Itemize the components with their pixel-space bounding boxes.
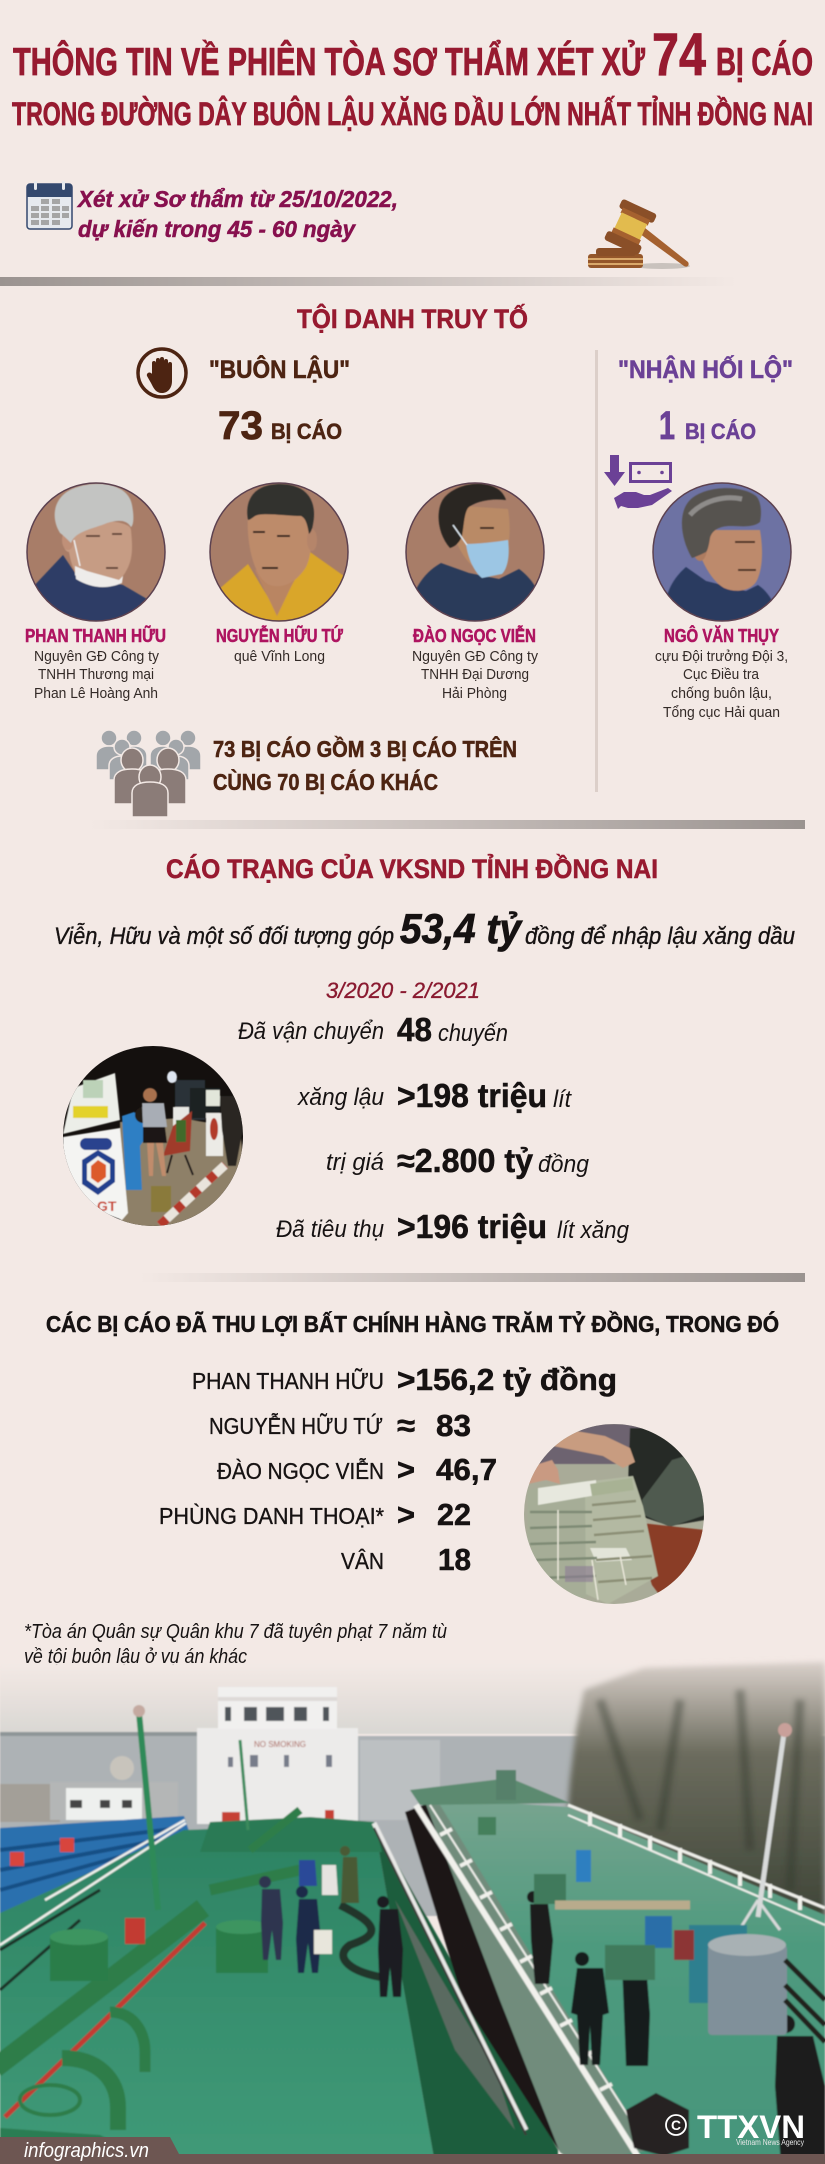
stat: value: đồng [538,1151,590,1178]
divider [90,820,805,829]
profit: Phùng Danh Thoại [159,1497,471,1532]
footnote: *Tòa án Quân sự Quân khu 7 đã tuyên phạt 7 năm tù [24,1621,447,1643]
defendant: Ngô Văn Thụy [655,625,788,721]
stat: smuggled fuel: lít [553,1086,572,1113]
period: 3/2020 - 2/2021 [326,978,480,1003]
profit: Đào Ngọc Viễn: 46,7 [436,1452,497,1487]
profit: Nguyễn Hữu Tứ: NGUYỄN HỮU TỨ [209,1411,383,1439]
profit: Phan Thanh Hữu: PHAN THANH HỮU [192,1367,384,1394]
heading: indictment: CÁO TRẠNG CỦA VKSND TỈNH ĐỒNG NAI [166,852,658,884]
defendant: Phan Thanh Hữu: TNHH Thương mại [38,666,154,683]
contribution statement [54,905,795,952]
defendant: Ngô Văn Thụy: Tổng cục Hải quan [663,704,780,721]
defendant: Ngô Văn Thụy: cựu Đội trưởng Đội 3, [655,648,788,665]
profit: Phùng Danh Thoại: > [397,1497,415,1532]
defendant: Ngô Văn Thụy: NGÔ VĂN THỤY [664,625,779,646]
defendant: Đào Ngọc Viễn: Nguyên GĐ Công ty [412,648,538,665]
stat: value: ≈2.800 tỷ [397,1142,534,1179]
charge: smuggling: "BUÔN LẬU" [209,354,350,384]
defendant: Đào Ngọc Viễn [412,625,538,702]
profit: Nguyễn Hữu Tứ [209,1408,471,1443]
defendant: Phan Thanh Hữu [25,625,166,702]
profit: Phùng Danh Thoại: PHÙNG DANH THOẠI* [159,1503,384,1529]
icon: gavel [588,199,690,269]
summary of defendants [213,735,517,795]
photo: stacks of money [524,1424,705,1610]
defendant: Ngô Văn Thụy: Cục Điều tra [683,666,760,683]
stat: consumed: >196 triệu [397,1208,547,1245]
divider [0,277,737,286]
icon: bribe money and hand [604,455,672,509]
portrait: Đào Ngọc Viễn [406,483,547,627]
summary of defendants: CÙNG 70 BỊ CÁO KHÁC [213,768,438,795]
profit: Nguyễn Hữu Tứ: ≈ [397,1408,415,1443]
column divider [595,350,598,792]
footnote: về tội buôn lậu ở vụ án khác [24,1646,247,1668]
defendant: Đào Ngọc Viễn: TNHH Đại Dương [421,666,529,683]
defendant: Phan Thanh Hữu: PHAN THANH HỮU [25,625,166,646]
portrait: Phan Thanh Hữu [26,482,166,622]
summary of defendants: 73 BỊ CÁO GỒM 3 BỊ CÁO TRÊN [213,735,517,762]
title: 74 [652,21,707,88]
profit: Vân: VÂN [341,1548,384,1574]
charge: taking bribes: 1 [659,404,675,448]
portrait: Nguyễn Hữu Tứ [210,483,348,626]
footer bar and website tab: infographics.vn [24,2140,149,2162]
profit: Phùng Danh Thoại: 22 [437,1497,471,1532]
contribution statement: đồng để nhập lậu xăng dầu [525,923,795,950]
profit: Vân: 18 [438,1542,471,1577]
icon: stop hand [138,349,186,397]
stat: consumed: Đã tiêu thụ [276,1216,384,1243]
stat: consumed [276,1208,630,1245]
profit: Đào Ngọc Viễn [217,1452,497,1487]
icon: calendar [27,181,72,229]
stat: smuggled fuel: >198 triệu [397,1077,547,1114]
trial date text: dự kiến trong 45 - 60 ngày [78,216,356,242]
defendant: Phan Thanh Hữu: Nguyên GĐ Công ty [34,648,159,665]
photo: petrol station: GT [97,1198,117,1214]
profit: Đào Ngọc Viễn: > [397,1452,415,1487]
defendant: Nguyễn Hữu Tứ: NGUYỄN HỮU TỨ [216,625,343,646]
stat: trips: 48 [397,1011,432,1048]
charge: taking bribes [618,354,793,448]
profit: Nguyễn Hữu Tứ: 83 [436,1408,471,1443]
footer bar and website tab [0,2137,825,2164]
divider [140,1273,805,1282]
stat: trips: Đã vận chuyển [238,1018,384,1045]
defendant: Nguyễn Hữu Tứ [216,625,343,665]
defendant: Nguyễn Hữu Tứ: quê Vĩnh Long [234,648,325,665]
charge: taking bribes: "NHẬN HỐI LỘ" [618,354,793,384]
footnote [24,1621,447,1668]
TTXVN logo: Vietnam News Agency [736,2138,804,2147]
charge: smuggling: BỊ CÁO [271,419,342,444]
profit: Phan Thanh Hữu: >156,2 tỷ đồng [397,1362,617,1397]
stat: value: trị giá [326,1149,384,1176]
photo: seized tanker ships [0,1662,825,2164]
icon: group of people [96,730,201,817]
photo: petrol station [63,1046,250,1228]
defendant: Phan Thanh Hữu: Phan Lê Hoàng Anh [34,685,158,702]
stat: smuggled fuel [297,1077,572,1114]
TTXVN logo: TTXVN [697,2109,805,2145]
stat: trips: chuyến [438,1020,508,1047]
profit: Phan Thanh Hữu [192,1362,617,1397]
defendant: Ngô Văn Thụy: chống buôn lậu, [671,685,772,702]
profit: Đào Ngọc Viễn: ĐÀO NGỌC VIỄN [217,1456,384,1484]
stat: value [326,1142,590,1179]
contribution statement: 53,4 tỷ [400,905,523,952]
trial date text [76,186,398,242]
stat: consumed: lít xăng [557,1217,630,1244]
defendant: Đào Ngọc Viễn: Hải Phòng [442,685,507,702]
stat: smuggled fuel: xăng lậu [297,1084,384,1111]
contribution statement: Viễn, Hữu và một số đối tượng góp [54,922,394,950]
charge: smuggling: 73 [218,404,263,448]
defendant: Đào Ngọc Viễn: ĐÀO NGỌC VIỄN [413,625,536,646]
portrait: Ngô Văn Thụy [653,483,791,625]
TTXVN logo: C [671,2117,681,2133]
title [12,21,813,132]
charge: smuggling [209,354,350,448]
profit: Vân [341,1542,471,1577]
heading: charges: TỘI DANH TRUY TỐ [297,302,528,334]
photo: seized tanker ships: NO SMOKING [254,1740,306,1749]
trial date text: Xét xử Sơ thẩm từ 25/10/2022, [76,186,398,212]
stat: trips [238,1011,508,1048]
charge: taking bribes: BỊ CÁO [685,419,756,444]
